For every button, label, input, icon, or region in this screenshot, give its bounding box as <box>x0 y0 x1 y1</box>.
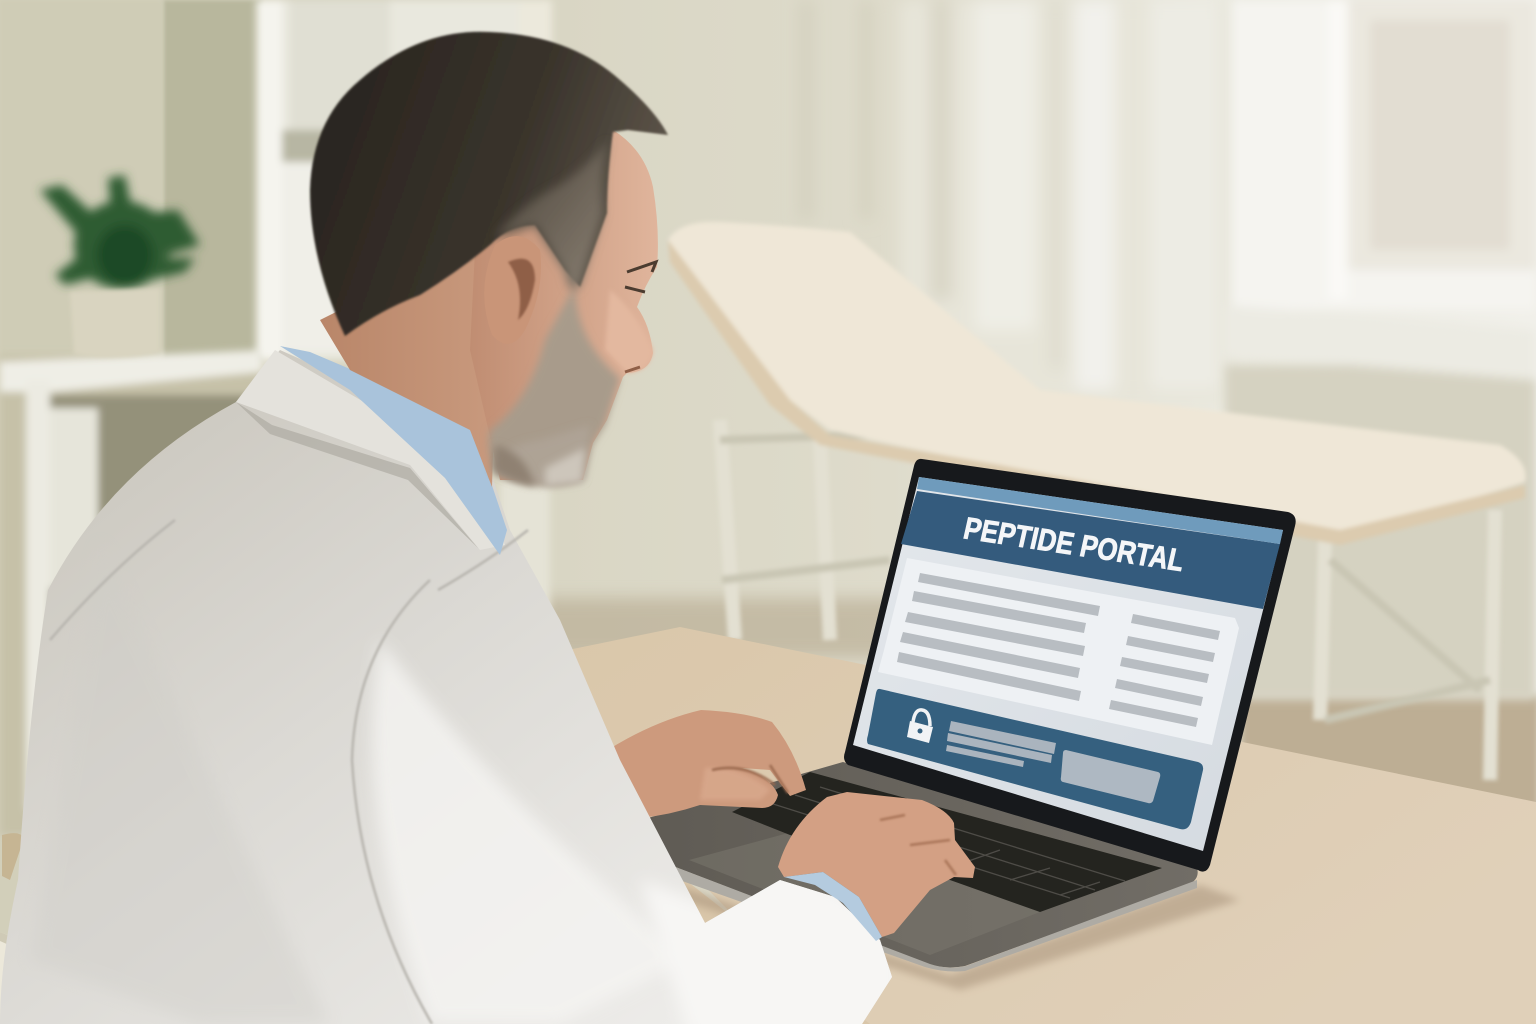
coat: bright sleeve highlight <box>646 880 892 1024</box>
man: shirt collar <box>280 346 507 555</box>
laptop: display <box>853 477 1283 851</box>
man: knuckle creases <box>880 815 956 875</box>
head: greying temple <box>495 140 608 290</box>
desk <box>568 627 1536 1024</box>
laptop: screen bezel <box>844 459 1296 872</box>
laptop: right text lines <box>1109 614 1220 727</box>
background: window <box>1225 0 1536 700</box>
laptop: login bar <box>867 689 1203 829</box>
background: side cabinet <box>0 350 262 835</box>
man: head <box>310 32 668 486</box>
laptop: shadow <box>650 880 1240 990</box>
chair <box>0 833 135 1024</box>
head: beard <box>488 285 620 486</box>
man: neck <box>320 230 500 487</box>
background: curtains <box>800 0 1230 400</box>
background: white shelving <box>256 0 552 610</box>
head: nose shadow and eye <box>605 262 656 373</box>
man: coat <box>0 350 900 1024</box>
head: ear <box>484 236 541 344</box>
icon: potted plant <box>40 175 200 358</box>
head: hair <box>310 32 668 336</box>
laptop: portal header <box>901 477 1283 609</box>
laptop: left text lines <box>897 573 1100 701</box>
coat: collar <box>236 350 505 550</box>
head: face <box>470 130 658 480</box>
man: near hand on keyboard <box>778 792 975 937</box>
laptop: base and keyboard <box>641 762 1198 972</box>
laptop <box>641 459 1296 990</box>
login button <box>1061 750 1160 803</box>
background: examination table <box>668 222 1526 780</box>
man: cuff <box>784 872 882 941</box>
login text lines <box>946 721 1056 767</box>
icon: padlock <box>907 710 933 743</box>
laptop: content card <box>878 558 1239 745</box>
coat: sleeve seam and folds <box>50 520 528 1024</box>
man: far hand on keyboard <box>600 710 806 818</box>
heading: Peptide Portal: PEPTIDE PORTAL <box>960 511 1188 578</box>
